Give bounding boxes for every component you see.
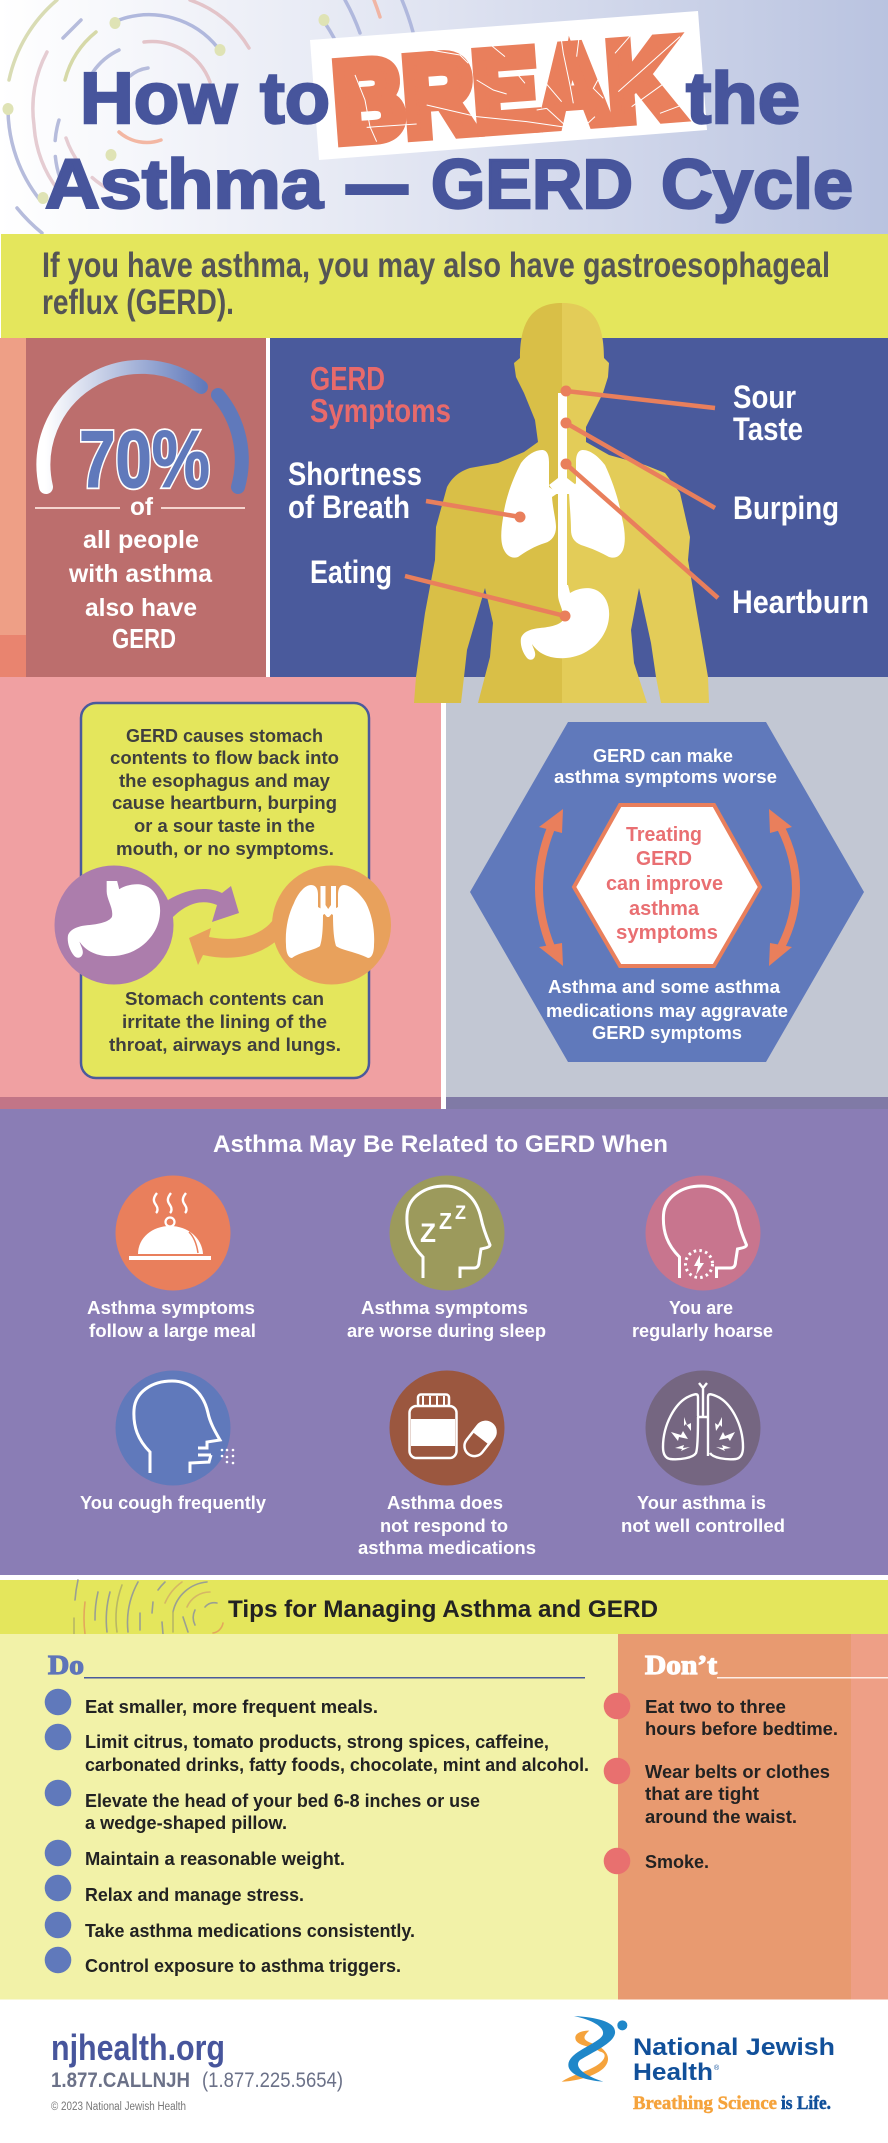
do bullets [45, 1689, 71, 1973]
panel: don't list [604, 1634, 888, 2000]
don't items: that are tight [645, 1784, 759, 1804]
icon: sleeping head: Z [439, 1208, 452, 1234]
tips heading band [0, 1580, 888, 1634]
do items [85, 1697, 589, 1976]
caption: hoarse: You are [669, 1298, 733, 1318]
symptom labels: of Breath [288, 489, 410, 525]
stat caption: also have [85, 594, 197, 622]
callout text top [110, 726, 339, 859]
footer contact: © 2023 National Jewish Health [51, 2101, 186, 2113]
do items: a wedge-shaped pillow. [85, 1813, 287, 1833]
don't items [645, 1697, 838, 1872]
do items: Control exposure to asthma triggers. [85, 1956, 401, 1976]
hexagon top text [554, 746, 777, 787]
stat caption [35, 493, 245, 654]
hexagon bottom text: Asthma and some asthma [548, 977, 781, 997]
stat caption: all people [83, 526, 199, 554]
footer contact: njhealth.org [51, 2027, 225, 2068]
icon: stomach circle [54, 866, 174, 984]
don't items: around the waist. [645, 1807, 797, 1827]
hexagon top text: GERD can make [593, 746, 733, 766]
arrow: stomach to lungs [168, 886, 239, 922]
panel: 70 percent stat [0, 338, 266, 677]
header background [0, 0, 888, 234]
title line 2: — [347, 145, 407, 223]
do heading: Do [48, 1650, 84, 1680]
don't items: Smoke. [645, 1852, 709, 1872]
do items: Maintain a reasonable weight. [85, 1849, 345, 1869]
callout text bottom: throat, airways and lungs. [109, 1035, 341, 1055]
decorative ring pattern [2, 0, 413, 233]
title line 2: GERD [431, 145, 633, 223]
caption: sleep: are worse during sleep [347, 1321, 546, 1341]
callout text top: GERD causes stomach [126, 726, 323, 746]
arrow: lungs to stomach [189, 920, 275, 965]
do items: carbonated drinks, fatty foods, chocolate, mint and alcohol. [85, 1755, 589, 1775]
icon: lungs circle [272, 866, 391, 984]
GERD symptoms heading: Symptoms [310, 392, 451, 429]
footer contact: 1.877.CALLNJH [51, 2069, 190, 2092]
BREAK word: BREAK [330, 16, 682, 165]
GERD symptoms heading [310, 360, 451, 429]
logo: National Jewish Health: is Life. [781, 2093, 831, 2114]
caption: large meal [87, 1298, 256, 1341]
lungs [501, 393, 625, 587]
tips heading: Tips for Managing Asthma and GERD [228, 1596, 658, 1623]
title line 2: Asthma [45, 145, 324, 223]
footer contact: (1.877.225.5654) [202, 2069, 343, 2092]
GERD symptoms heading: GERD [310, 360, 385, 397]
don't items: Eat two to three [645, 1697, 786, 1717]
icon: medicine bottle and pill [390, 1370, 504, 1486]
pink panel background [0, 677, 441, 1097]
caption: sleep [347, 1298, 546, 1341]
caption: hoarse: regularly hoarse [632, 1321, 773, 1341]
title line 1: How to: How [80, 59, 238, 139]
icon: sleeping head: Z [455, 1203, 466, 1224]
caption: cough: You cough frequently [80, 1493, 266, 1513]
hexagon bottom text: GERD symptoms [592, 1023, 742, 1043]
symptom labels: Shortness [288, 456, 422, 492]
don't bullets [604, 1693, 630, 1874]
caption: medications [358, 1493, 536, 1558]
callout text top: contents to flow back into [110, 748, 339, 768]
icon: sleeping head [390, 1176, 504, 1290]
icon: coughing head [116, 1370, 234, 1486]
inner hexagon: Treating [626, 824, 702, 846]
white divider: tips separator [0, 1575, 888, 1580]
symptom labels: Eating [310, 554, 392, 590]
inner hexagon [574, 805, 760, 966]
logo: National Jewish Health: ® [714, 2064, 720, 2072]
grey panel background [446, 677, 888, 1097]
callout text bottom: irritate the lining of the [122, 1012, 327, 1032]
caption: medications: Asthma does [387, 1493, 503, 1513]
callout text top: mouth, or no symptoms. [116, 839, 334, 859]
stat caption: with asthma [68, 560, 213, 588]
icon: sleeping head: Z [420, 1218, 436, 1248]
callout text top: cause heartburn, burping [112, 793, 337, 813]
symptom labels: Taste [733, 411, 803, 447]
callout text bottom [109, 989, 341, 1055]
do items: Limit citrus, tomato products, strong spices, caffeine, [85, 1732, 549, 1752]
do items: Take asthma medications consistently. [85, 1921, 415, 1941]
caption: not controlled: not well controlled [621, 1516, 785, 1536]
stomach [521, 585, 609, 660]
callout text bottom: Stomach contents can [125, 989, 324, 1009]
title line 2 [45, 145, 853, 223]
caption: medications: not respond to [380, 1516, 508, 1536]
don't heading: Don’t [645, 1650, 717, 1680]
caption: not controlled: Your asthma is [637, 1493, 766, 1513]
do items: Elevate the head of your bed 6-8 inches or use [85, 1791, 480, 1811]
don't items: Wear belts or clothes [645, 1762, 830, 1782]
arrow: right double arrow [769, 809, 796, 966]
body silhouette [405, 303, 718, 703]
inner hexagon: can improve [606, 873, 723, 895]
panel: do list [0, 1634, 618, 2000]
icon: lungs [646, 1370, 760, 1486]
footer contact [51, 2027, 343, 2113]
title line 1: the: the [686, 59, 800, 139]
callout: GERD explanation [54, 703, 391, 1078]
intro text [42, 246, 830, 322]
white torn label [310, 11, 707, 160]
symptom pointers [405, 386, 718, 622]
icon: hoarse throat head [646, 1176, 760, 1290]
hexagon bottom text: medications may aggravate [546, 1001, 788, 1021]
logo: National Jewish Health: National Jewish [633, 2034, 835, 2061]
inner hexagon: asthma [629, 898, 700, 920]
title [45, 11, 853, 223]
inner hexagon: symptoms [616, 922, 718, 944]
symptom labels: Heartburn [732, 584, 869, 620]
caption: not controlled [621, 1493, 785, 1536]
panel: related when [0, 1097, 888, 1575]
inner hexagon: GERD [636, 848, 692, 870]
caption: sleep: Asthma symptoms [361, 1298, 528, 1318]
blue panel: GERD symptoms background [270, 338, 888, 677]
stat caption: of [130, 493, 154, 521]
gauge arc [43, 367, 242, 487]
small ring pattern [74, 1580, 223, 1634]
arrow: left double arrow [539, 809, 563, 966]
logo: National Jewish Health: Health [633, 2059, 713, 2086]
symptom labels [288, 379, 869, 620]
hexagon cycle diagram [470, 722, 864, 1062]
title line 1: How to [80, 59, 330, 139]
70% figure: 70% [79, 415, 210, 505]
caption: hoarse [632, 1298, 773, 1341]
caption: large meal: follow a large meal [89, 1321, 256, 1341]
do items: Eat smaller, more frequent meals. [85, 1697, 378, 1717]
heading: Asthma May Be Related to GERD When [213, 1131, 668, 1158]
caption: large meal: Asthma symptoms [87, 1298, 255, 1318]
hexagon top text: asthma symptoms worse [554, 767, 777, 787]
stat caption: GERD [112, 623, 176, 654]
icon: helix [562, 2016, 627, 2082]
70% figure: 70% [79, 415, 210, 505]
don't items: hours before bedtime. [645, 1719, 838, 1739]
callout text top: or a sour taste in the [134, 816, 315, 836]
callout text top: the esophagus and may [119, 771, 330, 791]
do items: Relax and manage stress. [85, 1885, 304, 1905]
caption: medications: asthma medications [358, 1538, 536, 1558]
logo: National Jewish Health: Breathing Science [633, 2093, 777, 2114]
title line 1: How to: to [260, 59, 330, 139]
intro band [1, 234, 888, 338]
symptom labels: Sour [733, 379, 796, 415]
hexagon bottom text [546, 977, 788, 1043]
intro text: reflux (GERD). [42, 283, 234, 322]
symptom labels: Burping [733, 490, 839, 526]
logo: National Jewish Health [562, 2016, 835, 2114]
icon: covered meal [116, 1176, 230, 1290]
title line 2: Cycle [661, 145, 853, 223]
